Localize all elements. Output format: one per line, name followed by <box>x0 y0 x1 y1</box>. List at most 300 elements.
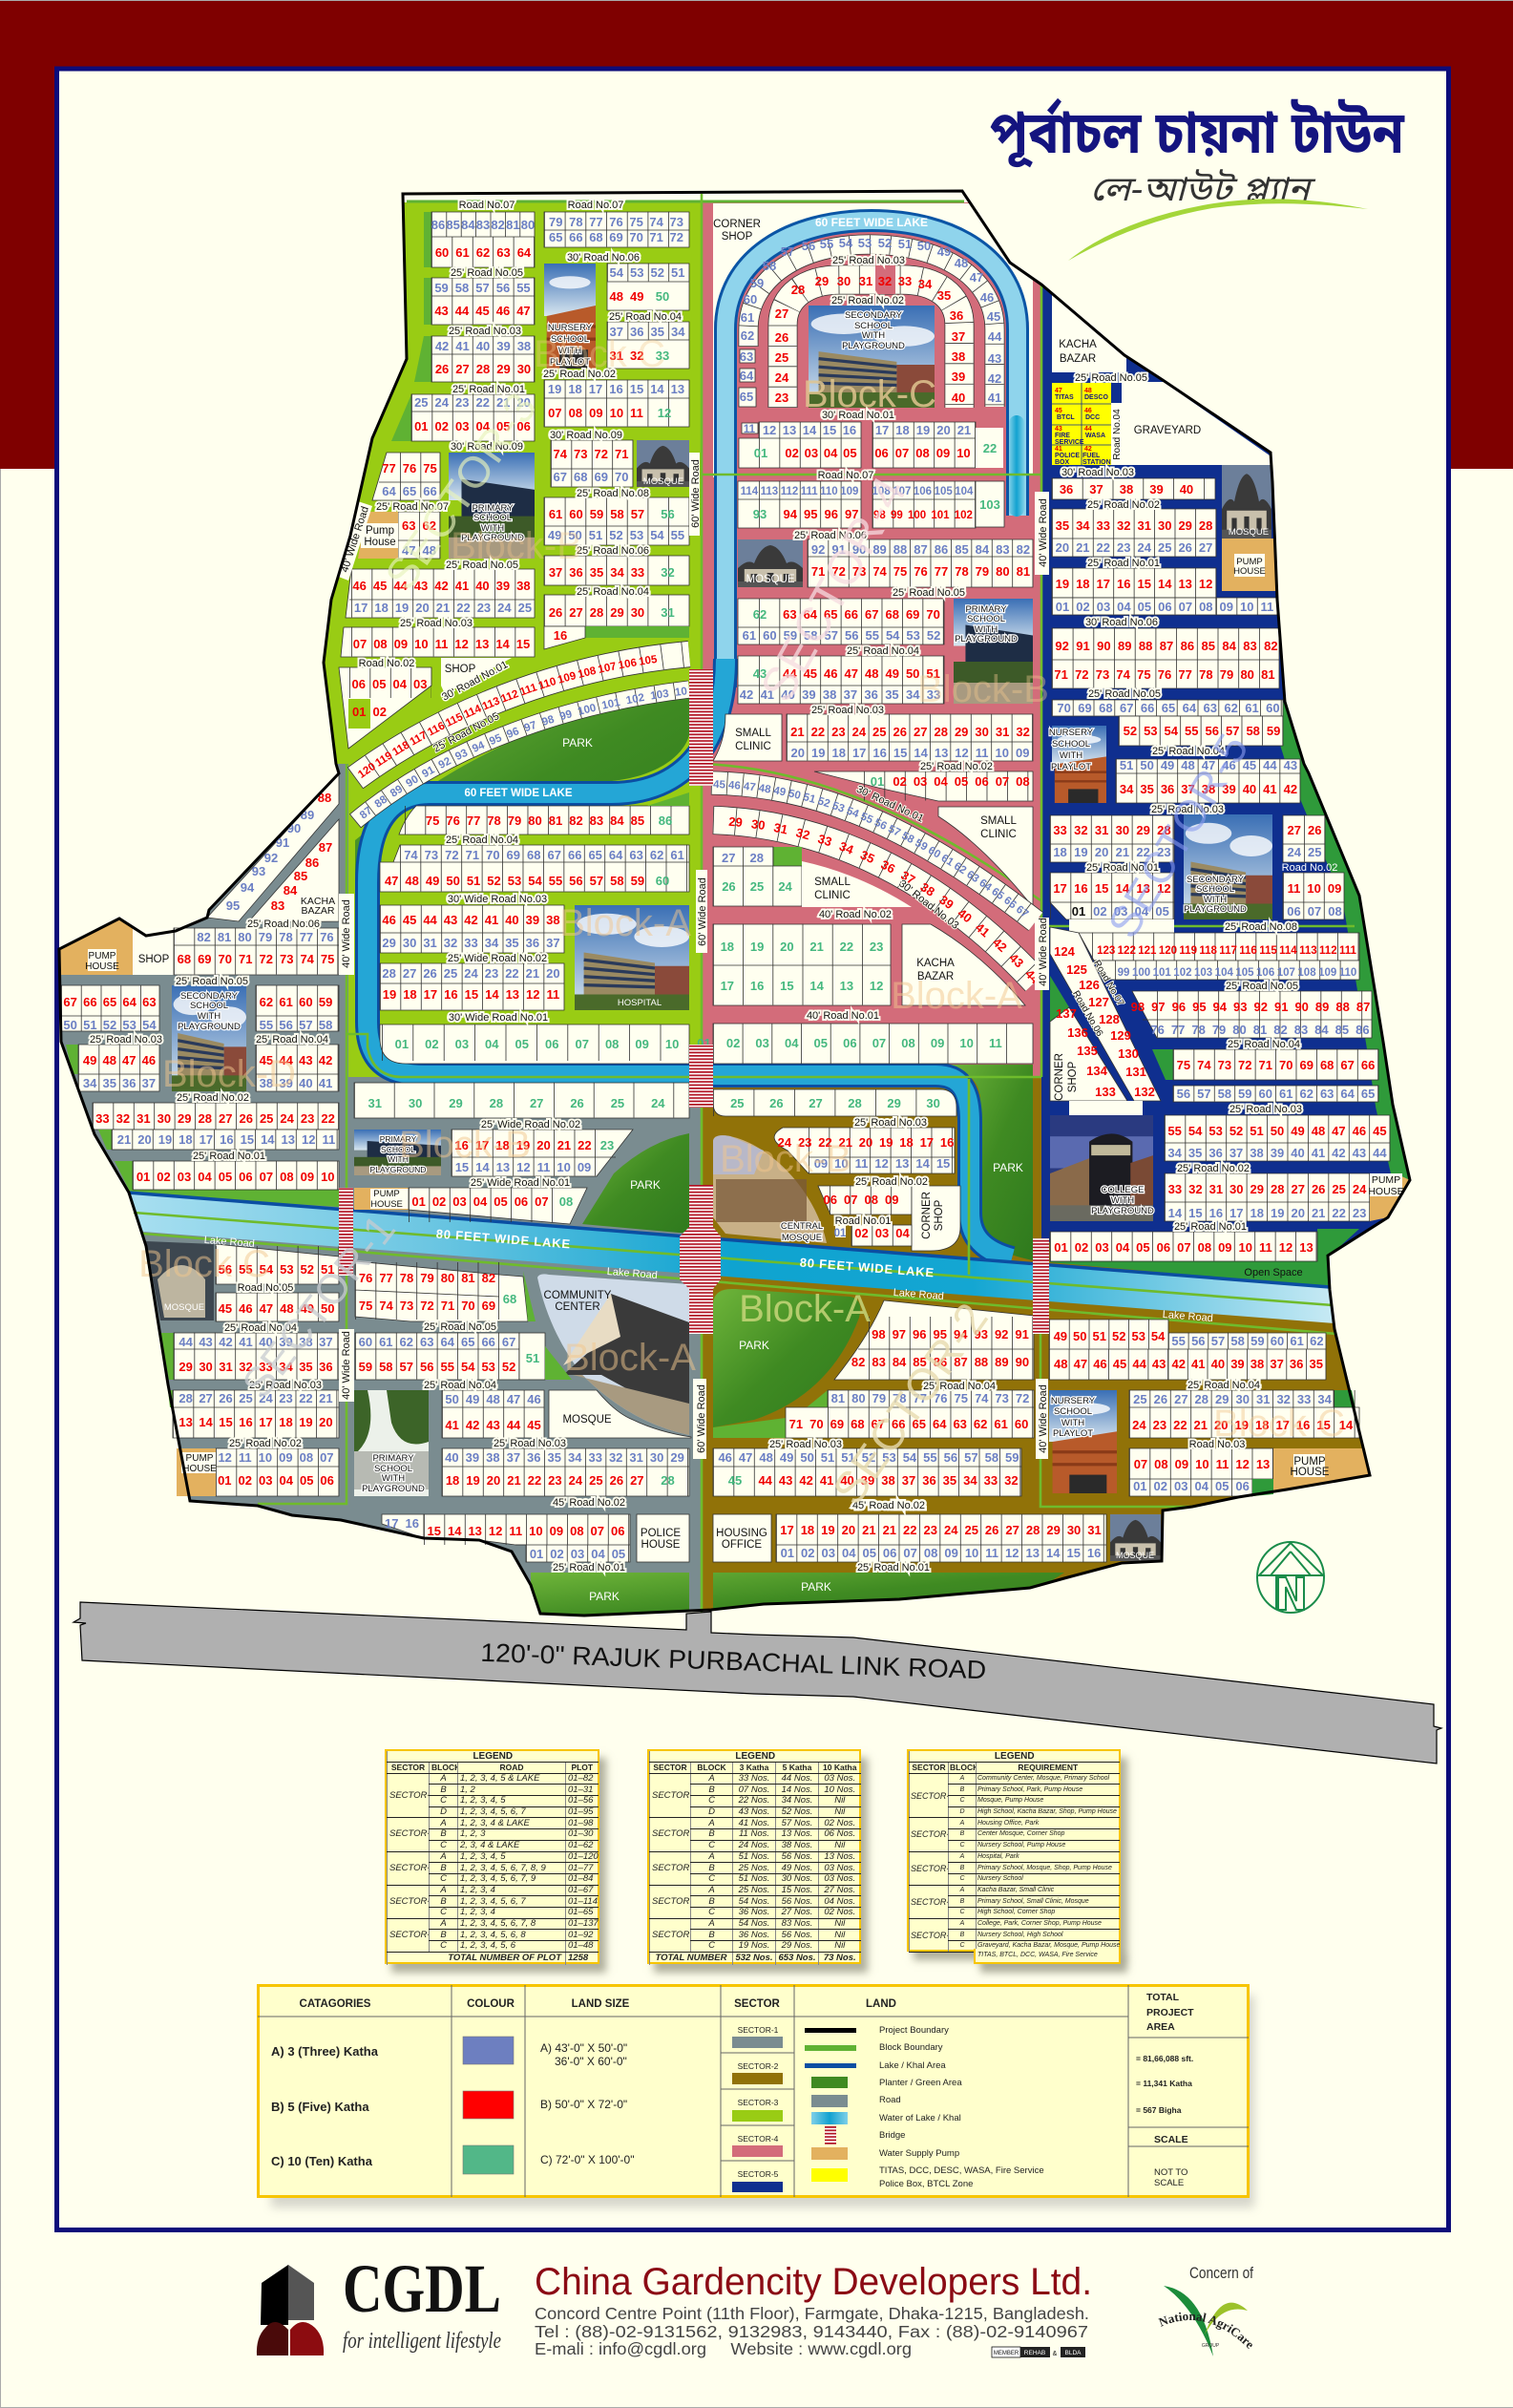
corner shop north: CORNER <box>713 219 761 230</box>
road labels: 25' Road No.01 <box>452 384 525 395</box>
panel: sector 5 plots: 76 77 78 79 80 81 82 83 84 85 86 <box>1150 1023 1370 1037</box>
small clinic north: CLINIC <box>980 829 1017 840</box>
service plots: DCC <box>1085 414 1100 421</box>
legend: katha counts table: C <box>708 1940 715 1951</box>
panel: sector 3 plots: 79 78 77 76 75 74 73 <box>549 215 683 229</box>
kacha bazar: KACHA <box>916 958 955 969</box>
panel: sector 4 plots: 17 18 19 20 21 <box>875 423 971 437</box>
legend: requirements table: A <box>960 1775 964 1782</box>
panel: sector 2 plots: 25 26 27 28 29 30 <box>730 1096 940 1110</box>
plots 88-95 and 83-87: 94 <box>241 880 255 895</box>
legend: plot roads table: 01–67 <box>568 1885 593 1895</box>
college: COLLEGE <box>1102 1185 1144 1195</box>
housing office <box>713 1514 771 1562</box>
diagonal plots 133-137 and corner shop: CORNER <box>1054 1053 1065 1101</box>
panel: sector 1 plots: 01 02 03 04 05 <box>530 1547 625 1561</box>
legend: katha counts table: C <box>708 1796 715 1806</box>
block watermarks: Block-D <box>162 1053 296 1095</box>
panel: sector 5 plots: 01 02 03 04 05 06 07 08 09 10 11 12 13 <box>1054 1240 1313 1255</box>
panel: sector 5 plots: 11 10 09 <box>1288 881 1341 896</box>
legend: requirements table: REQUIREMENT <box>1018 1763 1078 1772</box>
legend: requirements table: A <box>960 1920 964 1927</box>
plots 88-95 and 83-87: 85 <box>294 869 307 883</box>
legend: plot roads table: 01–92 <box>568 1930 593 1940</box>
secondary school sector 1: WITH <box>198 1011 221 1022</box>
diagonal plots 124-132: 126 <box>1079 978 1100 992</box>
diagonal plots 133-137 and corner shop: 137 <box>1056 1006 1077 1021</box>
secondary school sector 1: SCHOOL <box>190 1001 228 1011</box>
road labels: 25' Road No.01 <box>857 1562 930 1574</box>
project boundary <box>59 191 1410 1616</box>
legend: katha counts table: 41 Nos. <box>739 1818 769 1828</box>
primary school sector 4: WITH <box>975 624 998 635</box>
curved plots 41-65: 62 <box>741 328 754 343</box>
kacha bazar north <box>1052 292 1126 372</box>
categories <box>271 2044 379 2168</box>
legend: plot roads table: 01–62 <box>568 1840 593 1850</box>
panel: sector 4 plots: 12 13 14 15 16 <box>763 423 856 437</box>
panel: sector 5 plots: 18 19 20 21 22 23 <box>1053 845 1171 859</box>
legend: katha counts table: 51 Nos. <box>739 1873 769 1884</box>
legend: katha counts table: 56 Nos. <box>782 1896 812 1907</box>
legend: plot roads table: A <box>440 1851 447 1862</box>
corner shop south: CORNER <box>921 1192 933 1239</box>
panel: sector 1 plots: 15 14 13 12 11 10 09 <box>455 1160 591 1174</box>
pump house north-west <box>358 512 398 559</box>
mosque sector 2 <box>1110 1514 1161 1561</box>
sector watermarks: SECTOR-4 <box>750 468 917 710</box>
legend: katha counts table: 29 Nos. <box>782 1940 812 1951</box>
legend: katha counts table: Nil <box>834 1840 845 1850</box>
park: east <box>948 1065 1033 1260</box>
diagonal plots 133-137 and corner shop: SHOP <box>1067 1061 1079 1092</box>
diagonal plots 124-132: 132 <box>1134 1085 1155 1099</box>
panel: sector 2 plots: 71 70 69 68 67 66 65 64 63 62 61 60 <box>789 1417 1028 1431</box>
legend: katha counts table: 56 Nos. <box>782 1851 812 1862</box>
panel: sector 5 plots: 52 53 54 55 56 57 58 59 <box>1124 724 1280 738</box>
shop plot: SHOP <box>445 664 476 675</box>
legend: katha counts table: A <box>708 1773 715 1784</box>
panel: sector 5 plots: 123 122 121 120 119 118 117 116 115 114 113 112 111 <box>1097 945 1357 957</box>
block watermarks: Block-B <box>720 1138 851 1180</box>
panel: sector 5 plots: 20 21 22 23 24 25 26 27 <box>1056 540 1212 555</box>
road labels: 25' Road No.01 <box>1174 1221 1247 1233</box>
housing office: HOUSING <box>716 1528 767 1539</box>
legend: plot roads table: D <box>440 1806 447 1817</box>
road labels: 25' Road No.04 <box>446 834 518 846</box>
legend: plot roads table: 1, 2, 3, 4, 5, 6, 7 <box>460 1896 526 1907</box>
mosque sector 1 <box>146 1241 214 1320</box>
legend: requirements table: C <box>959 1842 965 1848</box>
panel: sector 1 plots: 82 81 80 79 78 77 76 <box>197 930 334 944</box>
header row: CATAGORIES <box>300 1998 371 2010</box>
pump house north-west: House <box>364 537 396 548</box>
legend: katha counts table <box>647 1749 861 1964</box>
panel: sector 4 plots: 93 <box>753 507 767 521</box>
service plots: STATION <box>1082 459 1111 466</box>
panel: sector 1 plots: 55 56 57 58 <box>260 1018 332 1032</box>
legend: requirements table: Hospital, Park <box>977 1853 1019 1860</box>
panel: sector 1 plots: 33 32 31 30 29 28 27 26 25 24 23 22 <box>95 1111 335 1126</box>
legend: plot roads table: 01–95 <box>568 1806 593 1817</box>
nursery school sector 3: PLAYLOT <box>550 357 590 368</box>
legend: requirements table: Graveyard, Kacha Bazar, Mosque, Pump House <box>977 1942 1120 1949</box>
road labels: 25' Road No.02 <box>229 1438 302 1449</box>
legend: katha counts table: 27 Nos. <box>824 1885 855 1895</box>
diagonal plots 124-132: 130 <box>1118 1046 1139 1061</box>
panel: sector 3 plots: 31 <box>661 605 675 620</box>
legend: plot roads table: 1, 2, 3, 4, 5, 6, 8 <box>460 1930 526 1940</box>
plots 88-95 and 83-87: 86 <box>305 855 319 870</box>
panel: sector 2 plots: 02 03 04 <box>854 1226 910 1240</box>
road labels: 25' Road No.05 <box>431 710 501 755</box>
wide road vertical labels: 40' Wide Road <box>1038 918 1049 986</box>
legend: katha counts table: 04 Nos. <box>824 1896 855 1907</box>
panel: sector 3 plots: 61 60 59 58 57 <box>549 507 644 521</box>
kacha bazar <box>902 924 1025 1005</box>
land key: Project Boundary <box>879 2025 949 2036</box>
curved plots 41-65: 49 <box>937 244 951 259</box>
diagonal plots 133-137 and corner shop: 134 <box>1086 1064 1108 1078</box>
panel: sector 1 plots: 60 61 62 63 64 65 66 67 <box>359 1335 515 1349</box>
primary school sector 3 <box>449 453 535 559</box>
service plots: 47 <box>1055 388 1062 394</box>
road labels: 25' Wide Road No.01 <box>471 1177 570 1189</box>
panel: sector 3 plots: 60 <box>656 874 669 888</box>
nursery school sector 5: NURSERY <box>1049 728 1094 738</box>
plots 88-95 and 83-87: 84 <box>284 883 298 898</box>
panel: sector 3 plots: 17 18 19 20 21 22 23 24 25 <box>354 601 532 615</box>
pump house lake: PUMP <box>373 1189 400 1199</box>
panel: sector 2 plots: 01 <box>834 1228 847 1239</box>
land key: Block Boundary <box>879 2042 943 2053</box>
graveyard <box>1122 382 1272 465</box>
panel: sector 3 plots: 06 05 04 03 <box>352 677 427 691</box>
primary school sector 1 south: SCHOOL <box>374 1464 412 1474</box>
secondary school sector 5: SECONDARY <box>1187 875 1245 885</box>
primary school sector 1 north: PRIMARY <box>380 1134 417 1144</box>
sector watermarks <box>234 383 1258 1513</box>
pump house lake: HOUSE <box>370 1199 403 1210</box>
legend: plot roads table: 1, 2, 3, 4, 5 & LAKE <box>460 1773 539 1784</box>
legend: requirements table: A <box>960 1853 964 1860</box>
curved plots 45-67: 45 46 47 48 49 50 51 52 53 54 55 56 57 58 59 60 61 62 63 64 65 66 67 <box>713 780 1029 917</box>
label: 80 feet lake east: 80 FEET WIDE LAKE <box>799 1255 935 1280</box>
legend: katha counts table: 02 Nos. <box>824 1818 855 1828</box>
panel: categories legend <box>258 1985 1254 2207</box>
panel: sector 4 plots: 27 28 <box>722 851 764 865</box>
panel: sector 3 plots: 43 44 45 46 47 <box>434 304 531 318</box>
diagonal plots 124-132: 124 <box>1054 944 1076 959</box>
service plots: 41 <box>1055 446 1062 453</box>
project area: NOT TO <box>1154 2167 1187 2178</box>
legend: katha counts table: 30 Nos. <box>782 1873 812 1884</box>
wide road vertical labels: 60' Wide Road <box>696 1384 707 1453</box>
curved plots 41-65: 46 <box>980 290 994 305</box>
road labels: 25' Road No.04 <box>1187 1380 1260 1391</box>
project area: SCALE <box>1154 2178 1184 2188</box>
pump house sector 5 <box>1222 539 1276 591</box>
legend: plot roads table: 1, 2, 3, 4, 5 <box>460 1851 506 1862</box>
curved plots 23-40: 23 <box>775 391 788 405</box>
panel: sector 3 plots: 37 36 35 34 <box>610 325 685 339</box>
central mosque: CENTRAL <box>781 1221 823 1232</box>
legend: plot roads table: 01–77 <box>568 1863 593 1873</box>
panel: sector 1 plots: 31 30 29 28 27 26 25 24 <box>368 1096 665 1110</box>
kacha bazar: BAZAR <box>917 971 954 982</box>
wide road vertical labels: 60' Wide Road <box>697 877 708 946</box>
panel: sector 3 plots: 37 36 35 34 33 <box>549 565 644 580</box>
panel: sector 3 plots: 16 <box>554 628 567 643</box>
nursery school sector 3 <box>544 264 596 369</box>
nursery school sector 2: NURSERY <box>1051 1396 1096 1406</box>
panel: sector 5 plots: 01 02 03 04 05 06 07 08 09 10 11 <box>1056 600 1273 614</box>
mosque sector 5 <box>1222 465 1271 539</box>
legend: plot roads table: 1, 2, 3 <box>460 1829 485 1839</box>
panel: sector 2 plots: 09 10 11 12 13 14 15 <box>814 1156 950 1171</box>
legend: requirements table: A <box>960 1887 964 1893</box>
road labels: 25' Road No.05 <box>1226 981 1298 992</box>
small clinic south: CLINIC <box>814 890 851 901</box>
road labels: 25' Road No.01 <box>1086 862 1159 874</box>
legend: katha counts table: 25 Nos. <box>739 1885 769 1895</box>
road labels: 25' Road No.03 <box>1151 804 1224 815</box>
road labels: Road No.07 <box>818 470 873 481</box>
legend: plot roads table: C <box>440 1873 447 1884</box>
secondary school sector 5: PLAYGROUND <box>1184 904 1247 915</box>
panel: sector 3 plots: 07 08 09 10 11 <box>548 406 643 420</box>
kacha bazar north: KACHA <box>1059 339 1097 350</box>
panel: sector 3 plots: 75 76 77 78 79 80 81 82 83 84 85 <box>426 813 644 828</box>
primary school sector 1 north: PLAYGROUND <box>370 1165 426 1174</box>
legend: katha counts table: 06 Nos. <box>824 1829 855 1839</box>
land sizes <box>540 2041 634 2166</box>
pump house south-east: PUMP <box>1293 1456 1326 1468</box>
legend: plot roads table: A <box>440 1918 447 1929</box>
diagonal plots 124-132: 129 <box>1110 1028 1131 1043</box>
service plots: 43 <box>1055 426 1062 433</box>
panel: sector 4 plots: 01 02 03 04 05 06 07 08 09 10 11 <box>697 1036 1002 1050</box>
road labels: 25' Road No.04 <box>577 586 649 598</box>
road labels: 25' Road No.06 <box>577 545 649 557</box>
legend: katha counts table: A <box>708 1818 715 1828</box>
panel: sector 5 plots: 71 72 73 74 75 76 77 78 79 80 81 <box>1054 667 1275 682</box>
plots 88-95 and 83-87: 89 <box>301 808 314 822</box>
curved plots 41-65: 54 <box>839 236 853 250</box>
pump house south-west: PUMP <box>186 1453 214 1464</box>
panel: sector 5 plots: 51 50 49 48 47 46 45 44 43 <box>1120 758 1297 772</box>
legend: katha counts table: 03 Nos. <box>824 1773 855 1784</box>
curved plots 41-65: 63 <box>740 349 753 364</box>
road labels: 25' Road No.03 <box>769 1439 842 1450</box>
block watermarks: Block-A <box>891 975 1022 1017</box>
road labels: Road No.07 <box>568 200 623 211</box>
secondary school sector 4: WITH <box>862 330 885 341</box>
pump house north-west corner: HOUSE <box>85 961 119 972</box>
panel: sector 2 plots: 25 26 27 28 29 30 31 32 33 34 <box>1133 1392 1333 1406</box>
curved plots 41-65: 59 <box>750 276 764 290</box>
housing office: OFFICE <box>722 1539 762 1551</box>
legend: katha counts table: A <box>708 1885 715 1895</box>
legend: requirements table: Community Center, Mosque, Primary School <box>977 1775 1109 1782</box>
land key: TITAS, DCC, DESC, WASA, Fire Service <box>879 2165 1044 2176</box>
mosque sector 1: MOSQUE <box>164 1302 204 1313</box>
legend: katha counts table: B <box>708 1829 715 1839</box>
primary school sector 4: PLAYGROUND <box>955 634 1018 644</box>
panel: sector 1 plots: 28 27 26 25 24 23 22 21 <box>179 1391 333 1405</box>
curved plots 23-40: 28 <box>791 283 805 297</box>
legend: plot roads table: 01–82 <box>568 1773 593 1784</box>
sector swatches: SECTOR-4 <box>738 2134 779 2144</box>
primary school sector 1 north: SCHOOL <box>381 1145 415 1154</box>
project area: = 567 Bigha <box>1136 2105 1182 2115</box>
road labels: 25' Road No.04 <box>224 1322 297 1334</box>
legend: katha counts table: 57 Nos. <box>782 1818 812 1828</box>
curved plots 41-65: 43 <box>988 351 1001 366</box>
legend: katha counts table: 24 Nos. <box>739 1840 769 1850</box>
road labels: 40' Road No.02 <box>819 909 892 920</box>
curved plots 23-40: 35 <box>937 288 951 303</box>
pump house north-west corner <box>59 919 133 975</box>
road labels: 25' Road No.02 <box>1087 499 1160 511</box>
legend: katha counts table: 15 Nos. <box>782 1885 812 1895</box>
nursery school sector 3: NURSERY <box>548 323 593 333</box>
shop west <box>133 928 174 975</box>
road labels: 25' Road No.05 <box>451 267 523 279</box>
land key: Lake / Khal Area <box>879 2060 946 2071</box>
road labels: 25' Road No.05 <box>446 560 518 571</box>
service plots: 42 <box>1084 446 1092 453</box>
panel: sector 4 plots: 01 <box>871 774 884 789</box>
panel: sector 5 plots: 01 <box>1072 904 1085 919</box>
legend: plot roads table: 1, 2, 3, 4 <box>460 1907 495 1917</box>
road labels: PARK <box>993 1161 1023 1174</box>
legend: plot roads table: 1, 2, 3, 4, 5, 6 <box>460 1940 515 1951</box>
curved plots 41-65: 47 <box>970 270 983 285</box>
curved plots 41-65: 44 <box>988 329 1002 344</box>
panel: sector 5 plots: 24 25 <box>1288 845 1321 859</box>
panel: sector 3 plots: 01 02 <box>352 705 387 719</box>
diagonal plots 133-137 and corner shop: 136 <box>1067 1025 1088 1040</box>
land key: Road <box>879 2095 901 2105</box>
road labels: Road No.07 <box>459 200 515 211</box>
road labels: 30' Road No.06 <box>567 252 640 264</box>
panel: sector 5 plots: Road No.04 <box>1112 409 1123 460</box>
plots 88-95 and 83-87: 83 <box>271 898 284 913</box>
panel: sector 4 plots: 11 <box>744 424 756 435</box>
panel: sector 3 plots: 86 <box>659 813 672 828</box>
legend: katha counts table: 54 Nos. <box>739 1918 769 1929</box>
road labels: 25' Road No.04 <box>424 1380 496 1391</box>
legend: requirements table: C <box>959 1942 965 1949</box>
pump house east: PUMP <box>1372 1174 1400 1186</box>
panel: sector 1 plots: 59 58 57 56 55 54 53 52 <box>359 1360 515 1374</box>
road labels: 25' Road No.03 <box>811 705 884 716</box>
panel: sector 3 plots: 26 27 28 29 30 <box>435 362 531 376</box>
tagline: for intelligent lifestyle <box>343 2329 501 2354</box>
legend: plot roads table: 01–56 <box>568 1796 593 1806</box>
land key <box>805 2025 1044 2189</box>
service plots: FUEL <box>1082 453 1101 459</box>
road labels: 25' Road No.08 <box>577 488 649 499</box>
mosque sector 3 <box>637 440 689 487</box>
curved plots 41-65: 51 <box>898 237 912 251</box>
legend: katha counts table: 34 Nos. <box>782 1796 812 1806</box>
panel: sector 3 plots: 19 18 17 16 15 14 13 <box>548 382 684 396</box>
panel: sector 1 plots: 68 69 70 71 72 73 74 75 <box>178 952 334 966</box>
panel: sector 3 plots: 47 48 <box>402 543 436 558</box>
wide road vertical labels: 40' Wide Road <box>1038 1384 1049 1453</box>
road labels: 25' Road No.05 <box>1088 688 1161 700</box>
college: WITH <box>1111 1195 1134 1206</box>
secondary school sector 4: SECONDARY <box>845 310 903 321</box>
service plots: BTCL <box>1057 414 1075 421</box>
header row <box>300 1998 896 2010</box>
project area <box>1136 1992 1194 2188</box>
panel: sector 4 plots: 62 <box>753 607 767 622</box>
panel: sector 1 plots: 67 66 65 64 63 <box>63 995 157 1009</box>
diagonal plots 133-137 and corner shop: 135 <box>1077 1044 1098 1058</box>
panel: sector 3 plots: 49 50 51 52 53 54 55 <box>548 528 684 542</box>
road labels: 30' Road No.06 <box>1085 617 1158 628</box>
panel: sector 5 plots: 06 07 08 <box>1287 904 1342 919</box>
legend: plot roads table: C <box>440 1796 447 1806</box>
road labels <box>90 200 1337 1603</box>
panel: sector 3 plots: 64 65 66 <box>382 484 437 498</box>
land key: Bridge <box>879 2130 905 2141</box>
north arrow <box>1257 1542 1324 1613</box>
legend: katha counts table: C <box>708 1873 715 1884</box>
panel: sector 1 plots: 23 <box>600 1138 614 1152</box>
legend: katha counts table: C <box>708 1907 715 1917</box>
panel: sector 5 plots: 14 15 16 17 18 19 20 21 22 23 <box>1168 1206 1366 1220</box>
legend: katha counts table: 3 Katha <box>740 1763 768 1772</box>
panel: sector 3 plots: 86 85 84 83 82 81 80 <box>431 218 535 232</box>
panel: sector 4 plots: 02 03 04 05 <box>785 446 857 460</box>
categories: C) 10 (Ten) Katha <box>271 2154 373 2168</box>
road labels: 25' Road No.05 <box>893 587 965 599</box>
legend: requirements table: Nursery School <box>977 1875 1023 1882</box>
road labels: Lake Road <box>893 1287 944 1302</box>
legend: plot roads table: A <box>440 1818 447 1828</box>
legend: plot roads table: C <box>440 1907 447 1917</box>
road labels: PARK <box>630 1178 661 1192</box>
diagonal plots 124-132: 125 <box>1066 962 1087 977</box>
panel: sector 5 plots: 33 32 31 30 29 28 <box>1053 823 1171 837</box>
road labels: Road No.03 <box>1189 1439 1245 1450</box>
legend: katha counts table: 02 Nos. <box>824 1907 855 1917</box>
legend: katha counts table: A <box>708 1918 715 1929</box>
panel: sector 1 plots: 76 77 78 79 80 81 82 <box>359 1271 495 1285</box>
mosque sector 4 <box>738 539 803 587</box>
curved plots 41-65: 42 <box>988 371 1001 386</box>
curved plots 41-65: 52 <box>878 236 892 250</box>
road labels: 45' Road No.02 <box>553 1497 625 1509</box>
block watermarks: Block-A <box>564 1337 696 1379</box>
legend: requirements table: High School, Kacha Bazar, Shop, Pump House <box>977 1808 1117 1815</box>
panel: sector 1 plots: 12 11 10 09 08 07 <box>218 1450 334 1465</box>
project area: SCALE <box>1154 2134 1188 2145</box>
legend: katha counts table: 10 Katha <box>823 1763 856 1772</box>
legend: katha counts table: 49 Nos. <box>782 1863 812 1873</box>
road labels: 25' Road No.04 <box>1228 1039 1300 1050</box>
wide road vertical labels: 40' Wide Road <box>339 505 371 574</box>
legend: requirements table: Primary School, Small Clinic, Mosque <box>977 1898 1089 1905</box>
legend: katha counts table: 19 Nos. <box>739 1940 769 1951</box>
panel: sector 5 plots: 17 16 15 14 13 12 <box>1053 881 1171 896</box>
road labels: 25' Road No.01 <box>1087 558 1160 569</box>
logo: CGDL wordmark: CGDL <box>343 2250 501 2327</box>
